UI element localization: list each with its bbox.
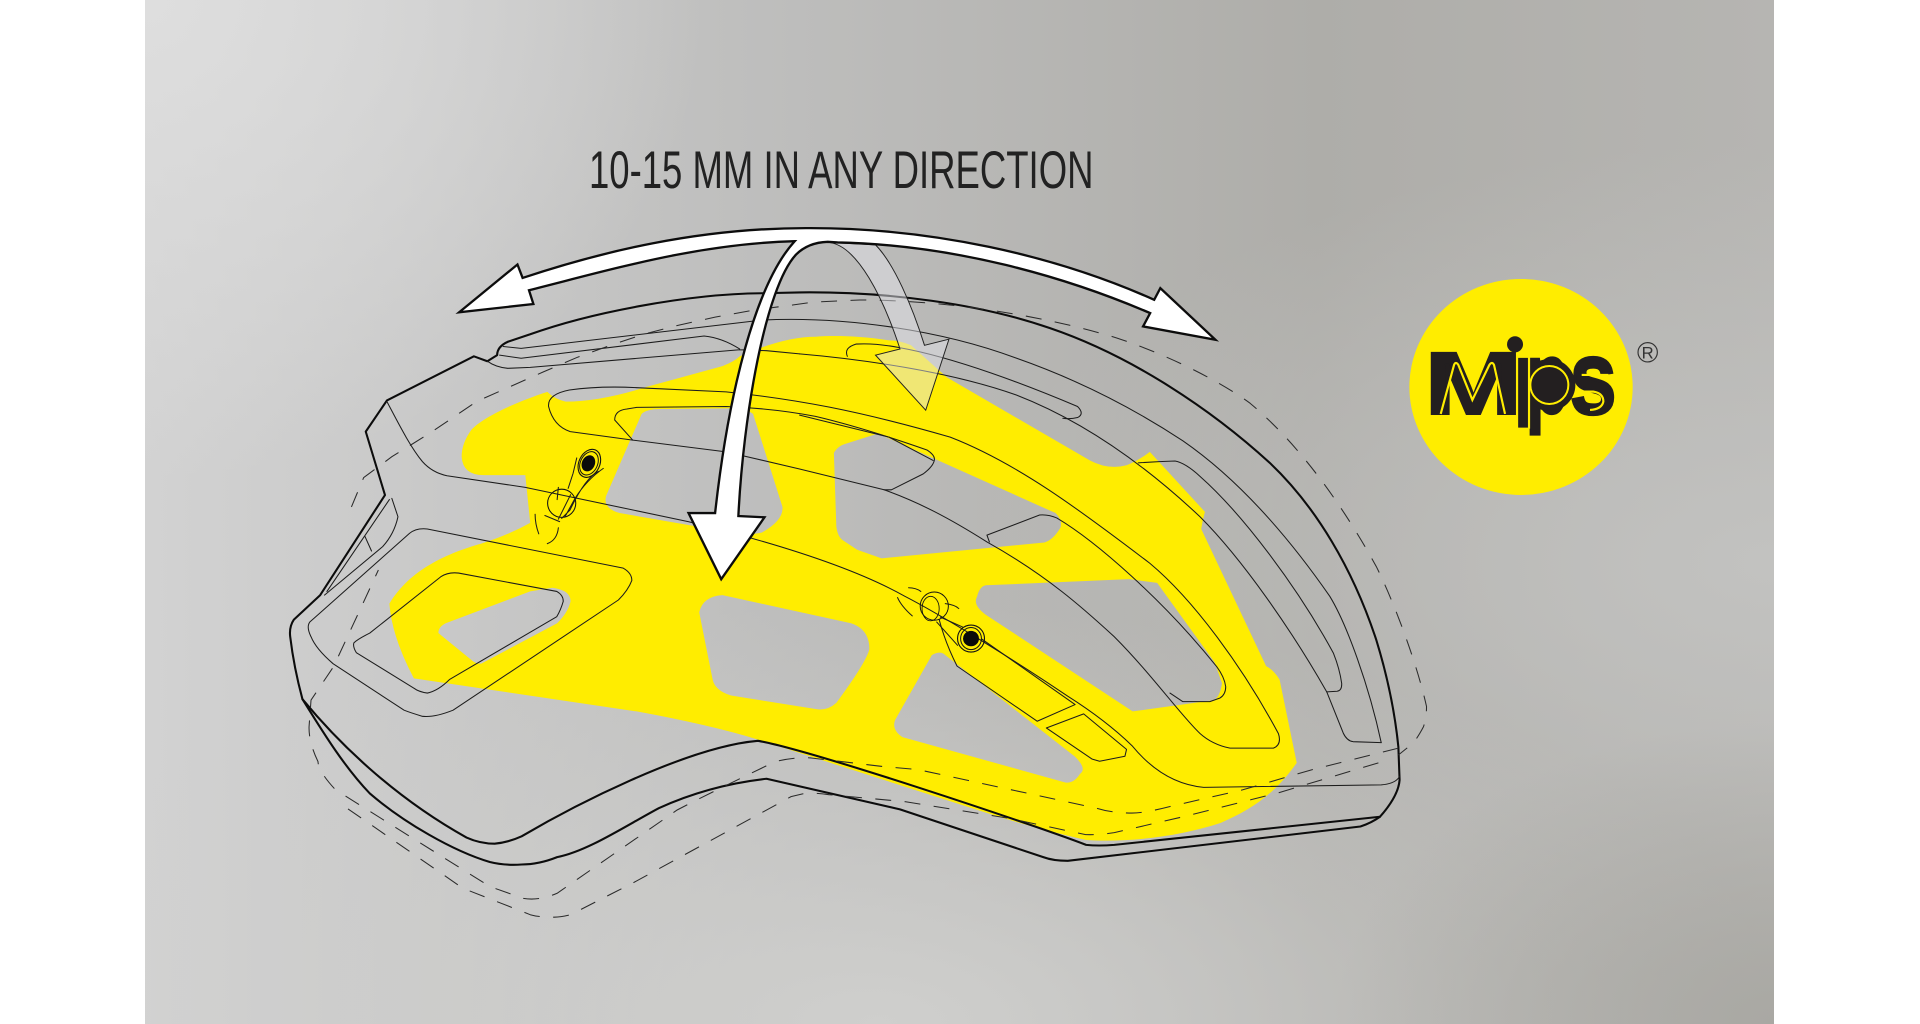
logo wordmark: p xyxy=(1525,321,1569,436)
helmet outline xyxy=(290,292,1400,865)
registered mark: R xyxy=(1642,343,1654,362)
logo wordmark: i xyxy=(1513,311,1533,456)
translucent ghost arrow xyxy=(828,242,949,410)
white double-headed and downward arrow xyxy=(459,228,1215,579)
logo yellow inline strokes xyxy=(1441,357,1608,429)
logo disc xyxy=(1409,279,1633,495)
logo wordmark xyxy=(1425,311,1616,456)
Mips logo xyxy=(1409,279,1657,495)
logo p bowl xyxy=(1523,359,1575,411)
yellow Mips liner xyxy=(389,336,1297,841)
dashed offset outlines xyxy=(309,300,1427,917)
logo wordmark: s xyxy=(1570,319,1616,435)
pin: rear connector xyxy=(898,588,984,652)
pin: front connector xyxy=(535,446,605,544)
registered mark xyxy=(1638,343,1657,362)
helmet inner contour lines xyxy=(308,319,1400,787)
logo wordmark: M xyxy=(1425,334,1522,432)
logo i dot xyxy=(1507,328,1530,354)
title: 10-15 MM IN ANY DIRECTION xyxy=(589,141,1093,200)
